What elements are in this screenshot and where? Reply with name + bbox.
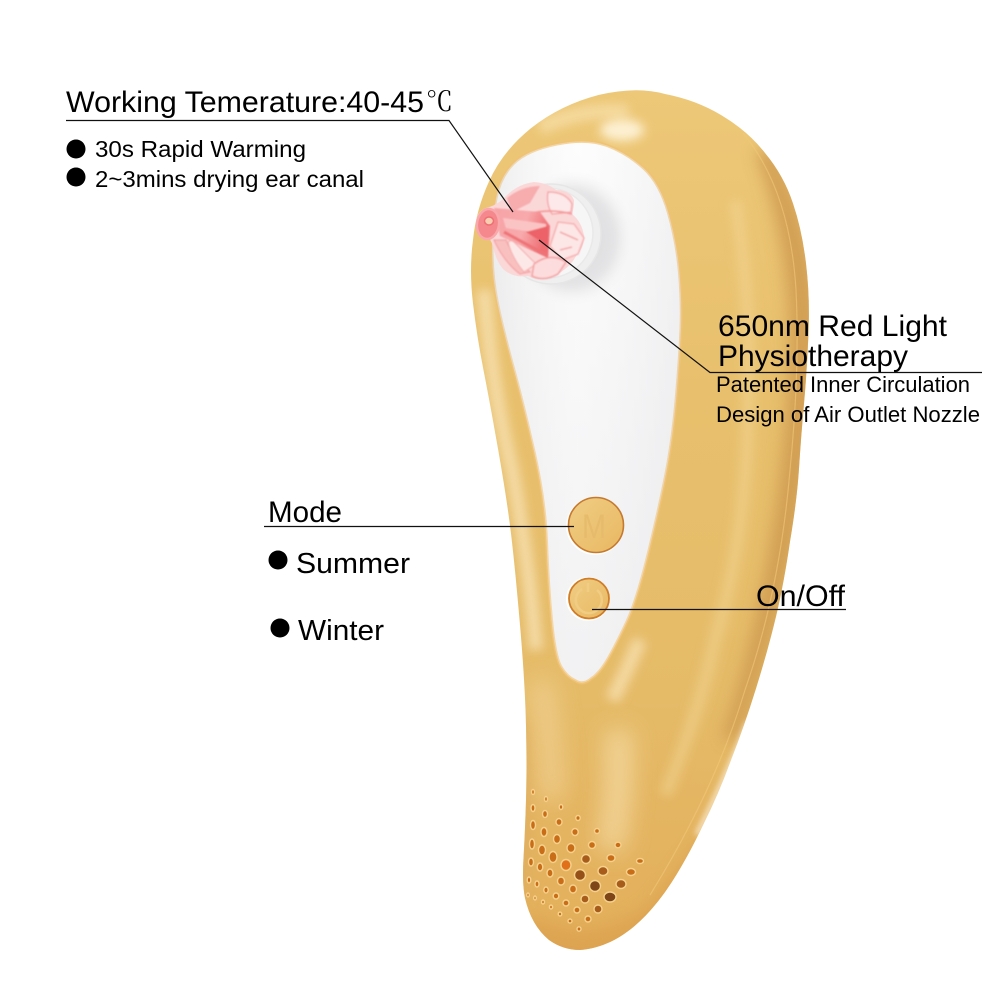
lower centre streak bbox=[610, 730, 619, 850]
nozzle base rings bbox=[501, 184, 601, 284]
description: nozzle: Patented Inner Circulation bbox=[716, 372, 970, 397]
white front panel bbox=[492, 141, 681, 683]
heading: mode: Mode bbox=[268, 496, 342, 529]
right seam bbox=[650, 133, 797, 895]
heading: working temperature: ℃ bbox=[426, 80, 453, 119]
device body bbox=[460, 80, 820, 970]
mode button M bbox=[566, 497, 624, 555]
red light nozzle bbox=[475, 182, 584, 279]
bottom warm shading bbox=[532, 844, 694, 950]
panel side highlight bbox=[612, 640, 640, 700]
nozzle petals bbox=[494, 186, 584, 279]
callout: working temperature bbox=[66, 80, 513, 212]
left rim shading bbox=[524, 720, 527, 900]
heading: working temperature: Working Temerature:40-45 bbox=[66, 86, 424, 119]
top highlight bbox=[540, 111, 628, 128]
mode button M: M bbox=[582, 508, 606, 546]
outer left strip highlight bbox=[484, 290, 536, 650]
callout: red light physiotherapy: Physiotherapy bbox=[718, 340, 908, 373]
right dark shading bbox=[722, 150, 816, 740]
bullet list: seasons: Winter bbox=[298, 615, 384, 647]
nozzle tip bbox=[475, 208, 501, 240]
power button bbox=[566, 577, 610, 621]
right long streak bbox=[665, 200, 749, 795]
callout: red light physiotherapy: Design of Air Outlet Nozzle bbox=[716, 402, 980, 427]
speaker holes bbox=[527, 790, 644, 931]
callout: red light physiotherapy bbox=[539, 240, 982, 427]
heading: red light: 650nm Red Light bbox=[718, 310, 948, 343]
callout: on/off: On/Off bbox=[756, 580, 846, 613]
bullet list: warming: 30s Rapid Warming bbox=[95, 136, 306, 162]
nozzle base shadow bbox=[512, 172, 632, 304]
edge glint bbox=[697, 722, 748, 835]
bullet list: seasons bbox=[268, 548, 410, 647]
bullet list: seasons: Summer bbox=[296, 548, 410, 580]
bullet list: warming bbox=[66, 136, 364, 192]
callout: mode bbox=[264, 496, 574, 647]
bullet list: warming: 2~3mins drying ear canal bbox=[95, 166, 364, 192]
